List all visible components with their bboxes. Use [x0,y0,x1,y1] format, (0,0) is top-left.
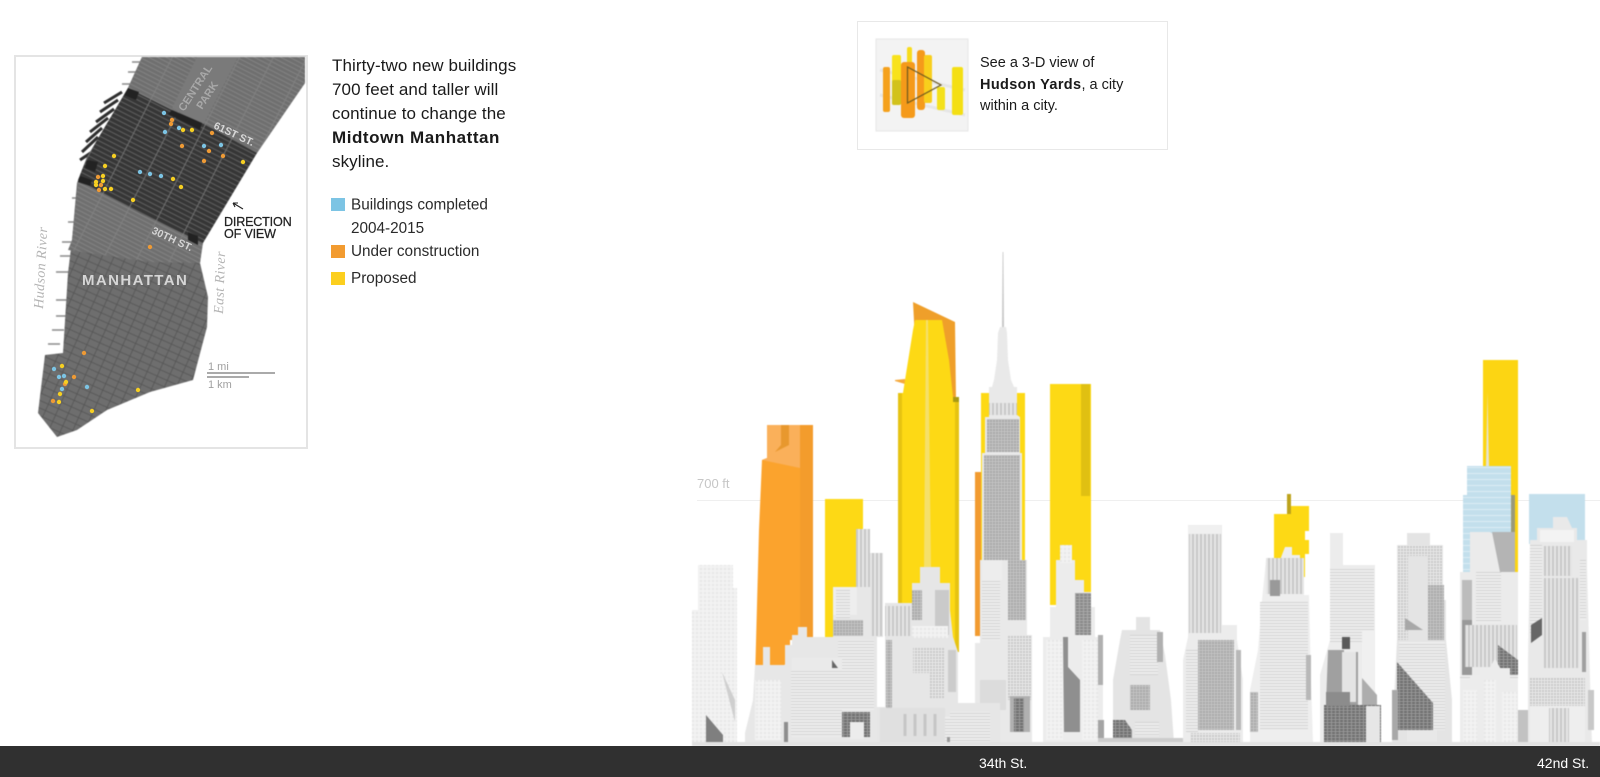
map label: East River: East River [212,251,229,315]
legend: completed: Buildings completed [351,196,488,214]
map: Manhattan island [38,57,305,437]
legend: proposed: Proposed [351,270,416,287]
tower: blue, completed east [1529,494,1585,544]
building: tower over blue completed [1460,532,1528,743]
tower: yellow, tallest east [1483,360,1518,572]
street-level base strip [692,742,1600,746]
700 ft reference line: 700 ft [697,476,730,491]
map: scale bar: 1 km [208,379,232,391]
map: Midtown highlighted area [78,88,257,243]
map: scale bar [207,362,275,388]
label: 42nd St.: 42nd St. [1537,755,1589,771]
building: mid-block mass [1098,617,1183,743]
map label: Hudson River: Hudson River [32,226,51,310]
tower: yellow, proposed [825,499,863,637]
antenna on completed tower [1486,392,1489,466]
intro text: 700 feet and taller will [332,80,498,99]
map: direction of view arrow [233,203,243,209]
tower: yellow, proposed with dark stripe [1050,384,1091,605]
building: tower with dark wedge [1392,533,1452,744]
map: blue dots, completed buildings [52,111,223,391]
tower: blue, completed [1463,466,1515,572]
skyline [692,252,1600,746]
proposed and under construction towers [755,302,1585,680]
intro text: skyline. [332,152,389,171]
intro text: continue to change the [332,104,506,123]
building: isolated west tower [692,565,737,743]
map label: direction of view [224,216,291,238]
map: upper Manhattan streets [68,57,305,263]
panel: locator map [15,56,307,448]
map label: Central Park: CENTRAL [176,63,215,114]
tower: proposed behind Empire State, with orange edge [975,393,1025,636]
map: dark blocks [78,88,202,245]
street bar [0,746,1600,777]
tower: yellow, small proposed [1274,494,1309,577]
building: tower at 34th-street block [1043,545,1104,743]
building: stepped tower under small yellow [1250,547,1313,743]
building: cluster below Hudson Yards tower [877,567,970,743]
thumbnail: 3-D view of Hudson Yards [876,39,968,131]
building: slab tower [1183,525,1243,743]
legend: completed [331,196,488,237]
map label: Central Park: PARK [194,80,221,112]
map label: 30th St.: 30TH ST. [150,225,195,254]
tower: Hudson Yards supertall [895,302,959,652]
tower: orange, under construction west [755,425,813,680]
legend: completed: 2004-2015 [351,220,424,237]
map label: 61st St.: 61ST ST. [212,120,256,149]
link text: within a city. [979,98,1058,114]
building: tower with dark annex [1320,533,1381,745]
legend: under construction: Under construction [351,243,479,260]
building: Empire State Building [950,252,1032,743]
map: scale bar: 1 mi [208,361,229,373]
map: piers [48,62,142,344]
link text: Hudson Yards, a city [980,77,1123,93]
map label: direction of view: DIRECTION [224,215,292,229]
building: east tower [1528,517,1594,745]
label: 34th St.: 34th St. [979,755,1027,771]
intro text: Midtown Manhattan [332,128,500,147]
existing buildings [692,252,1600,746]
map: yellow dots, proposed [57,128,245,413]
map: Central Park [172,57,238,125]
map label: direction of view: OF VIEW [224,227,276,241]
panel: Hudson Yards 3-D link [858,22,1168,150]
building: west cluster [745,529,885,743]
legend [331,196,488,287]
intro text: Thirty-two new buildings [332,56,516,75]
map: orange dots, under construction [51,118,225,403]
map label: Manhattan: MANHATTAN [82,272,188,289]
link text: See a 3-D view of [980,55,1094,71]
